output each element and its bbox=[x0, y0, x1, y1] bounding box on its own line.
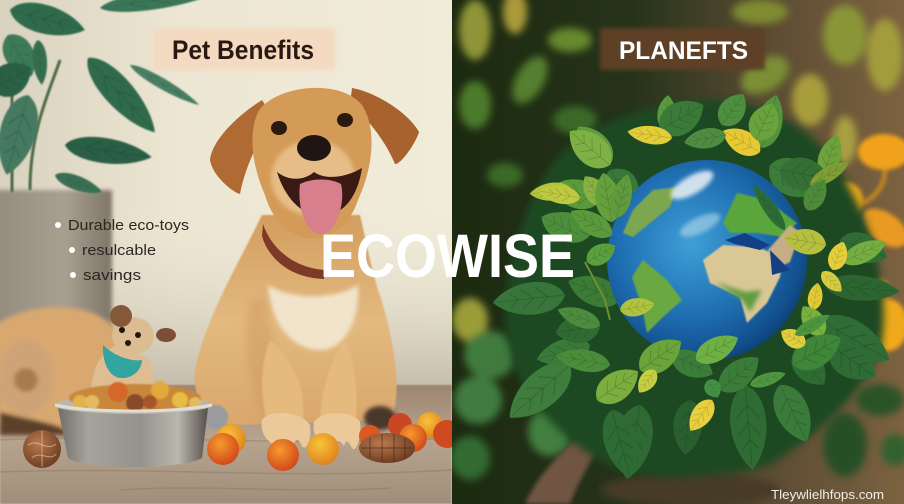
bullet list: savings bbox=[83, 267, 141, 284]
orange background leaves bbox=[842, 131, 904, 354]
center title: ECOWISE bbox=[320, 222, 575, 290]
floor bbox=[0, 385, 452, 504]
heading: pet benefits: Pet Benefits bbox=[172, 35, 314, 65]
dog paws bbox=[262, 413, 310, 448]
heading: planet benefits: PLANEFTS bbox=[619, 37, 748, 65]
plush toy in background bbox=[0, 307, 120, 435]
dog body bbox=[195, 215, 397, 425]
dog head bbox=[252, 88, 372, 238]
leaf wreath back bbox=[491, 87, 901, 482]
bowl of food bbox=[55, 381, 212, 467]
tongue bbox=[299, 180, 342, 234]
potted plant bbox=[0, 0, 200, 329]
bullet list bbox=[55, 217, 189, 284]
heading: planet benefits bbox=[600, 28, 765, 70]
footer url: Tleywlielhfops.com bbox=[771, 488, 884, 502]
balls bbox=[23, 412, 461, 471]
dog bbox=[195, 88, 419, 449]
branch bbox=[524, 440, 595, 504]
wreath base mass bbox=[506, 100, 884, 476]
bullet list: resulcable bbox=[82, 242, 156, 259]
nose bbox=[297, 135, 331, 161]
bokeh foliage bbox=[450, 0, 904, 504]
mouth bbox=[277, 168, 362, 210]
globe bbox=[607, 160, 807, 360]
toy dog bbox=[92, 305, 176, 388]
dog ears bbox=[210, 100, 265, 194]
bullet list: Durable eco-toys bbox=[68, 217, 189, 234]
panel: planet benefits bbox=[450, 0, 904, 504]
panel: pet benefits bbox=[0, 0, 461, 504]
collar bbox=[262, 224, 325, 279]
continents bbox=[623, 165, 800, 333]
heading: pet benefits bbox=[153, 28, 335, 70]
eyes bbox=[271, 121, 287, 135]
leaf wreath front bbox=[536, 98, 890, 436]
